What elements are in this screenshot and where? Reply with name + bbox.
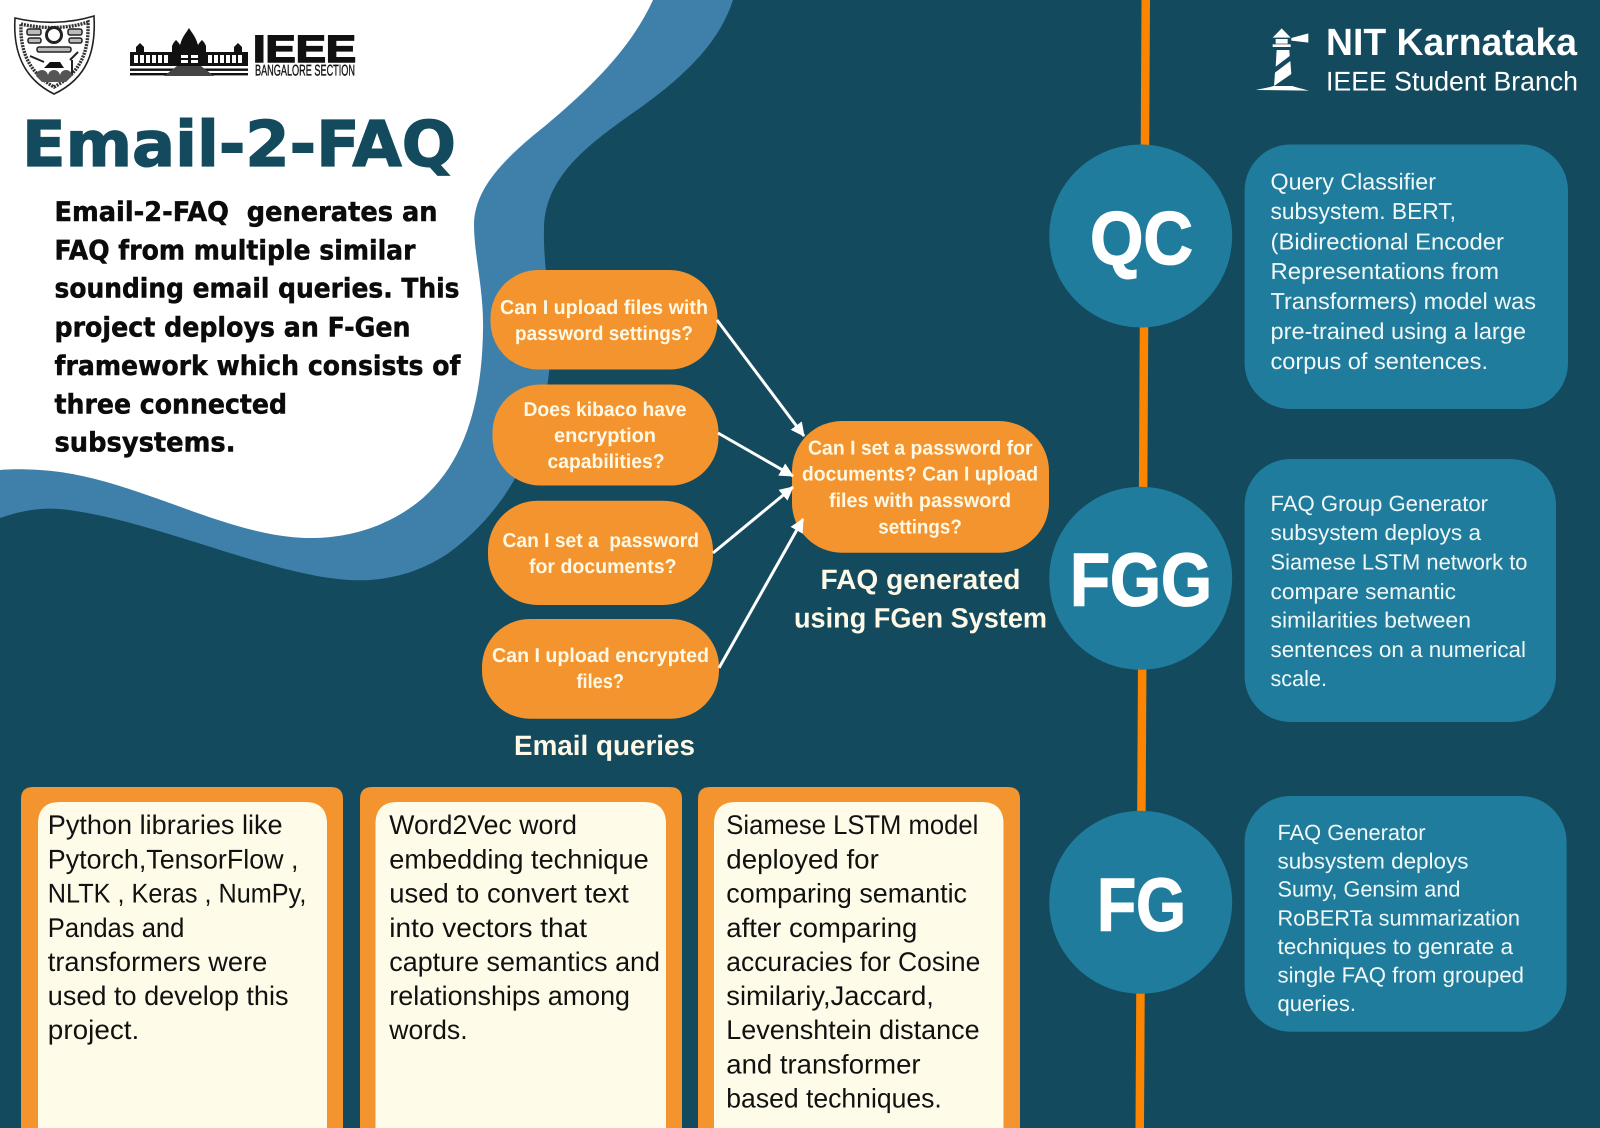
section name: BANGALORE SECTION <box>255 62 355 80</box>
card: Python libraries: Pytorch,TensorFlow , <box>48 844 298 874</box>
logo: NIT Karnataka IEEE Student Branch <box>1256 22 1578 96</box>
intro paragraph: FAQ from multiple similar <box>54 236 416 266</box>
intro paragraph <box>54 197 461 459</box>
email query pill 1: password settings? <box>515 323 693 345</box>
arrow: query 4 to FAQ <box>719 519 803 668</box>
panel: Query Classifier: Representations from <box>1270 258 1499 284</box>
card: Python libraries: transformers were <box>48 947 267 977</box>
card: Siamese LSTM: accuracies for Cosine <box>726 947 980 977</box>
email query pill 4 <box>482 619 719 719</box>
email query pill 3: for documents? <box>529 556 676 578</box>
panel: FAQ Group Generator: subsystem deploys a <box>1270 520 1482 545</box>
generated FAQ pill: documents? Can I upload <box>802 464 1038 486</box>
card: Siamese LSTM: comparing semantic <box>726 879 967 909</box>
IEEE Student Branch: IEEE Student Branch <box>1326 66 1578 96</box>
card: Word2Vec: relationships among <box>389 981 630 1011</box>
card: Python libraries: project. <box>48 1015 139 1045</box>
panel: Query Classifier: Query Classifier <box>1270 168 1436 194</box>
panel: Query Classifier: subsystem. BERT, <box>1270 198 1456 224</box>
panel: FAQ Group Generator: sentences on a numerical <box>1270 637 1526 662</box>
email query pill 2: encryption <box>554 425 656 447</box>
intro paragraph: sounding email queries. This <box>54 274 460 305</box>
panel: Query Classifier: Transformers) model was <box>1270 288 1536 314</box>
card: Word2Vec: Word2Vec word <box>389 810 577 840</box>
panel: FAQ Generator: single FAQ from grouped <box>1278 963 1524 988</box>
panel: FAQ Group Generator: compare semantic <box>1270 579 1456 604</box>
panel: FAQ Generator: RoBERTa summarization <box>1278 905 1520 930</box>
card: Python libraries: Pandas and <box>48 913 184 943</box>
card: Siamese LSTM: after comparing <box>726 913 917 943</box>
panel: Query Classifier: (Bidirectional Encoder <box>1270 228 1504 254</box>
card: Siamese LSTM: and transformer <box>726 1050 921 1080</box>
card: Python libraries: used to develop this <box>48 981 288 1011</box>
intro paragraph: three connected <box>54 389 287 420</box>
NIT Karnataka: NIT Karnataka <box>1326 22 1578 64</box>
generated FAQ pill: settings? <box>878 516 962 538</box>
card: Word2Vec: into vectors that <box>389 913 588 943</box>
subsystem: QC circle: QC <box>1090 196 1193 280</box>
email query pill 4: files? <box>576 671 624 693</box>
intro paragraph: framework which consists of <box>54 351 461 382</box>
panel: Query Classifier: corpus of sentences. <box>1270 348 1488 374</box>
card: Word2Vec: capture semantics and <box>389 947 660 977</box>
arrow: query 2 to FAQ <box>718 433 793 476</box>
card: Word2Vec: embedding technique <box>389 844 649 874</box>
subsystem: QC circle <box>1049 144 1232 328</box>
card: Word2Vec <box>360 787 682 1128</box>
IEEE wordmark: IEEE <box>253 29 356 71</box>
panel: FAQ Generator <box>1245 796 1567 1032</box>
card: Siamese LSTM: based techniques. <box>726 1084 942 1114</box>
panel: FAQ Generator: queries. <box>1278 991 1356 1016</box>
icon: palace silhouette <box>130 28 248 76</box>
panel: FAQ Group Generator: FAQ Group Generator <box>1270 491 1488 516</box>
intro paragraph: project deploys an F-Gen <box>54 312 410 344</box>
card: Python libraries: NLTK , Keras , NumPy, <box>48 879 306 909</box>
icon: lighthouse <box>1256 28 1309 91</box>
subsystem: FGG circle <box>1049 487 1232 670</box>
panel: Query Classifier <box>1245 144 1568 409</box>
email query pill 3 <box>488 501 713 605</box>
subsystem: FGG circle: FGG <box>1070 538 1212 622</box>
timeline line <box>1136 0 1150 1128</box>
card: Python libraries: Python libraries like <box>48 810 283 840</box>
card: Siamese LSTM: Levenshtein distance <box>726 1015 980 1045</box>
panel: FAQ Generator: FAQ Generator <box>1278 820 1426 845</box>
wave: white header area <box>0 0 653 538</box>
email query pill 3: Can I set a password <box>502 530 699 552</box>
panel: FAQ Group Generator: similarities between <box>1270 608 1471 632</box>
email query pill 1: Can I upload files with <box>500 297 708 319</box>
arrow: query 1 to FAQ <box>717 320 804 436</box>
card: Word2Vec: words. <box>388 1015 468 1045</box>
panel: FAQ Generator: techniques to genrate a <box>1278 934 1514 959</box>
label: FAQ generated: FAQ generated <box>820 564 1020 595</box>
arrow: query 3 to FAQ <box>713 487 793 553</box>
title: Email-2-FAQ <box>22 108 456 181</box>
email query pill 2: Does kibaco have <box>524 399 686 421</box>
card: Siamese LSTM: deployed for <box>726 844 879 874</box>
panel: FAQ Group Generator: Siamese LSTM network to <box>1270 549 1528 574</box>
card: Siamese LSTM <box>698 787 1020 1128</box>
intro paragraph: Email-2-FAQ generates an <box>54 197 438 228</box>
email query pill 2 <box>492 384 718 486</box>
label: FAQ generated <box>794 564 1047 634</box>
generated FAQ pill: files with password <box>829 490 1011 512</box>
label: Email queries: Email queries <box>514 730 695 761</box>
wave: blue band <box>0 0 733 580</box>
email query pill 4: Can I upload encrypted <box>492 645 709 667</box>
generated FAQ pill <box>792 421 1049 553</box>
card: Word2Vec: used to convert text <box>389 879 629 909</box>
email query pill 2: capabilities? <box>548 451 664 473</box>
panel: FAQ Group Generator <box>1245 459 1556 722</box>
panel: FAQ Generator: Sumy, Gensim and <box>1278 877 1460 902</box>
card: Siamese LSTM: Siamese LSTM model <box>726 810 978 840</box>
subsystem: FG circle <box>1049 811 1232 994</box>
subsystem: FG circle: FG <box>1097 862 1186 946</box>
logo: NITK shield <box>15 16 94 94</box>
panel: FAQ Group Generator: scale. <box>1270 666 1327 691</box>
logo: IEEE Bangalore Section <box>130 28 356 80</box>
card: Python libraries <box>21 787 343 1128</box>
generated FAQ pill: Can I set a password for <box>808 438 1033 460</box>
label: FAQ generated: using FGen System <box>794 602 1047 634</box>
email query pill 1 <box>490 270 718 370</box>
panel: Query Classifier: pre-trained using a large <box>1270 318 1526 344</box>
panel: FAQ Generator: subsystem deploys <box>1278 848 1468 873</box>
intro paragraph: subsystems. <box>54 428 236 459</box>
card: Siamese LSTM: similariy,Jaccard, <box>726 981 934 1011</box>
